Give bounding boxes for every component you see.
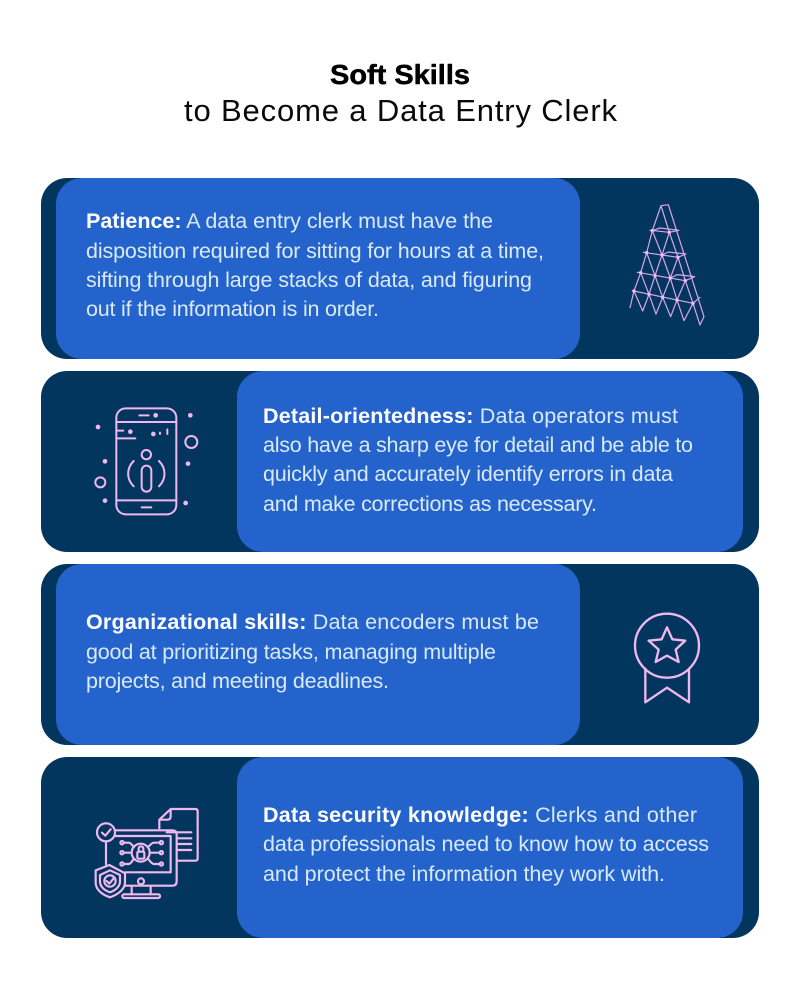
title: to Become a Data Entry Clerk <box>184 93 618 128</box>
text: patience description <box>86 209 544 321</box>
text: detail-orientedness description: and make corrections as necessary. <box>263 492 597 516</box>
text: patience description: Patience: A data entry clerk must have the <box>86 209 493 233</box>
text: data security description: and protect the information they work with. <box>263 862 665 886</box>
icon: house of cards <box>630 205 704 325</box>
text: detail-orientedness description <box>263 404 693 516</box>
icon: data security computer <box>96 809 198 898</box>
text: organizational skills description: projects, and meeting deadlines. <box>86 669 389 693</box>
text: data security description: Data security knowledge: Clerks and other <box>263 803 697 827</box>
text: patience description: sifting through large stacks of data, and figuring <box>86 268 532 292</box>
title <box>184 59 618 128</box>
text: patience description: disposition required for sitting for hours at a time, <box>86 239 544 263</box>
text: patience description: out if the information is in order. <box>86 297 379 321</box>
panel: patience <box>41 178 759 359</box>
text: detail-orientedness description: also have a sharp eye for detail and be able to <box>263 433 693 457</box>
text: data security description: data professionals need to know how to access <box>263 832 709 856</box>
icon: award ribbon <box>635 614 699 702</box>
text: organizational skills description: Organizational skills: Data encoders must be <box>86 610 539 634</box>
text: organizational skills description: good at prioritizing tasks, managing multiple <box>86 640 496 664</box>
panel: data security knowledge <box>41 757 759 938</box>
text: organizational skills description <box>86 610 539 693</box>
text: detail-orientedness description: quickly and accurately identify errors in data <box>263 462 673 486</box>
title: Soft Skills <box>330 59 470 90</box>
icon: smartphone info <box>95 408 197 514</box>
text: data security description <box>263 803 709 886</box>
text: detail-orientedness description: Detail-orientedness: Data operators must <box>263 404 678 428</box>
panel: organizational skills <box>41 564 759 745</box>
panel: detail-orientedness <box>41 371 759 552</box>
